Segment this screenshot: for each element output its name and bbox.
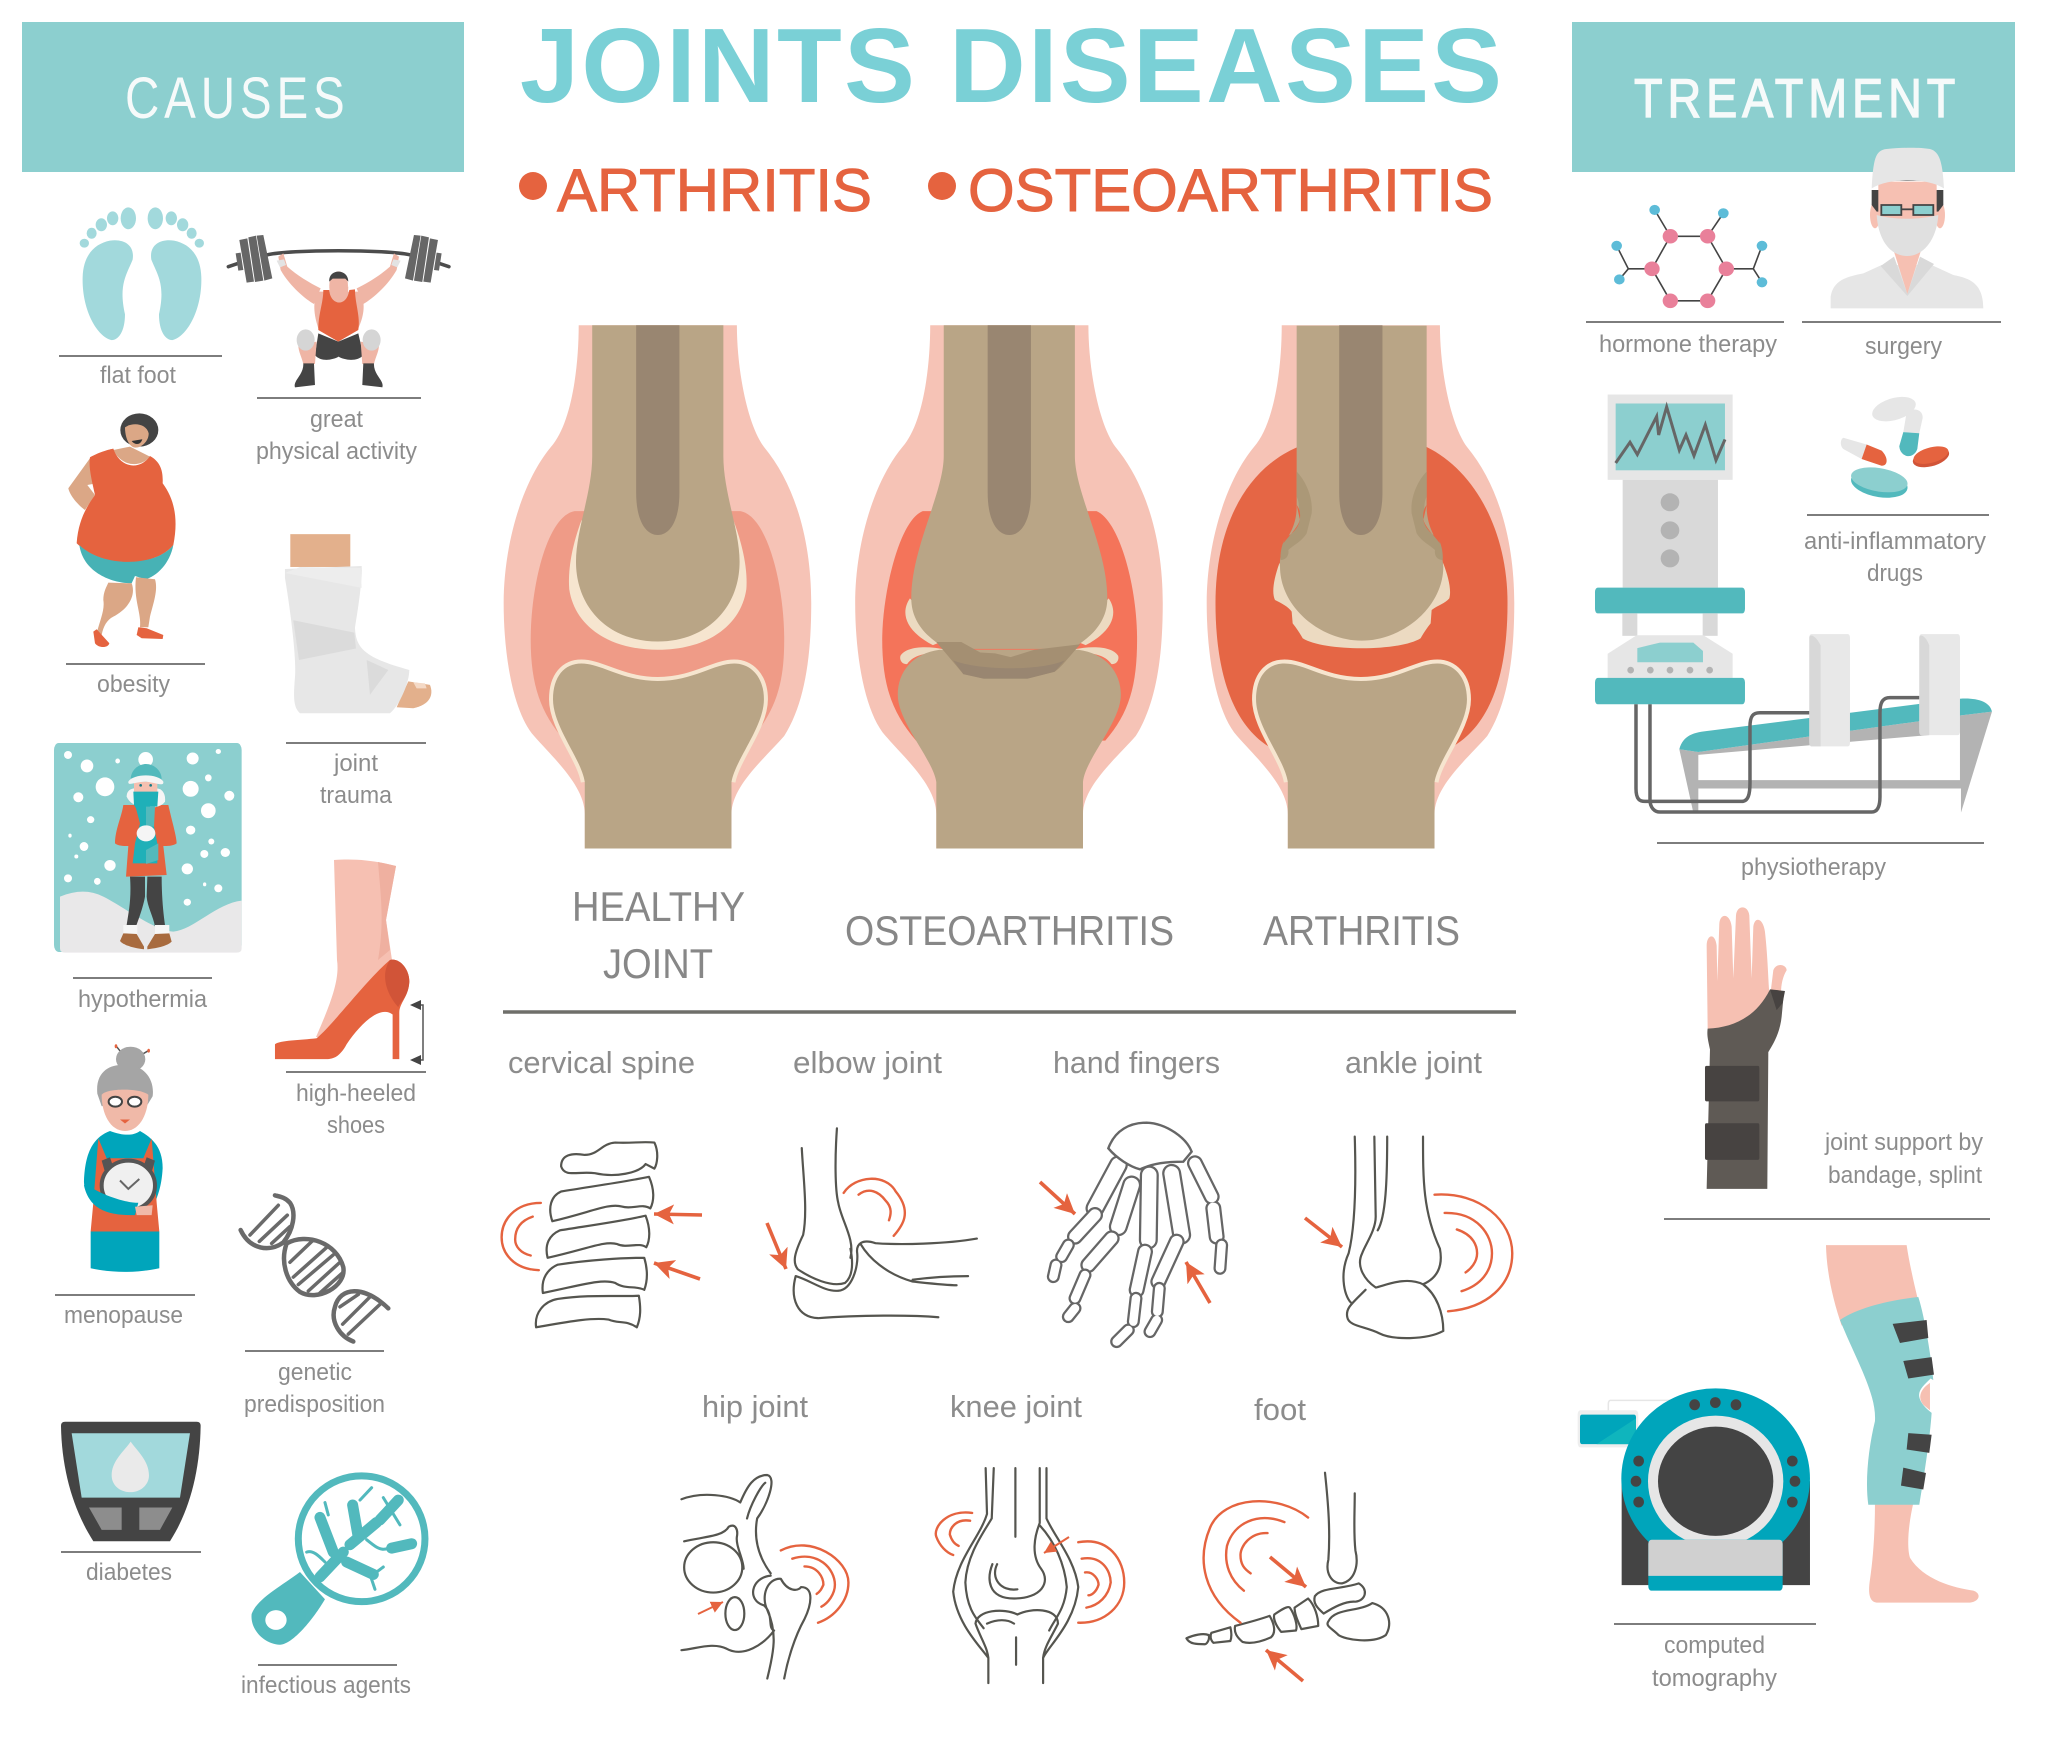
diagram: hand bones: [1040, 1123, 1222, 1342]
diagram: healthy joint: [504, 325, 811, 849]
diagram: elbow joint: [767, 1128, 977, 1318]
diagram: cervical spine: [502, 1142, 702, 1327]
icon: joint trauma: [285, 534, 431, 713]
label: flat foot: flat foot: [100, 362, 176, 389]
label: ankle joint: ankle joint: [1345, 1045, 1482, 1080]
label: anti-inflammatory drugs: [1804, 515, 1989, 587]
label: joint support by bandage, splint: [1664, 1129, 1990, 1219]
icon: surgeon: [1831, 148, 1983, 308]
panel: treatment: [1572, 22, 2015, 1692]
icon: knee brace: [1826, 1245, 1979, 1603]
heading: causes: [22, 22, 464, 172]
heading: treatment: TREATMENT: [1634, 67, 1955, 129]
icon: glucose meter: [61, 1422, 201, 1541]
caption: arthritis: ARTHRITIS: [1263, 907, 1460, 954]
label: computed tomography: computed: [1664, 1632, 1765, 1659]
label: infectious agents: infectious agents: [241, 1672, 411, 1699]
icon: magnifier with bacteria: [252, 1476, 425, 1645]
icon: obesity: [68, 413, 176, 647]
label: hip joint: hip joint: [702, 1389, 808, 1424]
caption: osteoarthritis: OSTEOARTHRITIS: [845, 907, 1174, 954]
heading: causes: CAUSES: [125, 67, 345, 131]
label: joint trauma: trauma: [320, 782, 393, 809]
label: joint support by bandage, splint: bandage, splint: [1828, 1162, 1982, 1189]
panel: affected joints: [502, 1045, 1512, 1683]
label: high-heeled shoes: [286, 1072, 426, 1139]
label: computed tomography: [1614, 1624, 1816, 1692]
label: surgery: surgery: [1865, 333, 1942, 360]
diagram: arthritis joint: [1207, 325, 1514, 849]
icon: pills: [1841, 393, 1950, 501]
label: hypothermia: hypothermia: [78, 986, 208, 1013]
label: menopause: menopause: [64, 1302, 183, 1329]
label: knee joint: knee joint: [950, 1389, 1082, 1424]
label: anti-inflammatory drugs: drugs: [1867, 560, 1923, 587]
label: obesity: [66, 664, 205, 698]
subtitle: arthritis: ARTHRITIS: [557, 157, 872, 224]
label: genetic predisposition: [244, 1351, 385, 1418]
subtitle: osteoarthritis: OSTEOARTHRITIS: [968, 157, 1493, 224]
label: genetic predisposition: predisposition: [244, 1391, 385, 1418]
panel: joint comparison: [503, 325, 1516, 1012]
diagram: ankle joint: [1305, 1137, 1512, 1338]
icon: hormone molecule: [1611, 205, 1767, 308]
label: hand fingers: hand fingers: [1053, 1045, 1220, 1080]
title: JOINTS DISEASES: [520, 7, 1502, 125]
label: joint trauma: joint: [333, 750, 378, 777]
label: joint trauma: [286, 743, 426, 809]
label: anti-inflammatory drugs: anti-inflammatory: [1804, 528, 1986, 555]
icon: hypothermia: [54, 743, 242, 953]
diagram: knee joint: [936, 1468, 1124, 1683]
heading: treatment: [1572, 22, 2015, 172]
icon: menopause: [84, 1044, 163, 1272]
diagram: osteoarthritis joint: [855, 325, 1163, 849]
icon: flat foot: [80, 207, 204, 340]
diagram: foot: [1186, 1473, 1389, 1681]
label: elbow joint: elbow joint: [793, 1045, 942, 1080]
label: cervical spine: cervical spine: [508, 1045, 695, 1080]
icon: CT scanner: [1578, 1388, 1810, 1591]
label: computed tomography: tomography: [1652, 1665, 1777, 1692]
caption: healthy joint: [572, 883, 745, 987]
label: high-heeled shoes: high-heeled: [296, 1080, 416, 1107]
icon: physiotherapy machine: [1595, 395, 1992, 813]
label: physiotherapy: physiotherapy: [1741, 854, 1886, 881]
label: great physical activity: great: [310, 406, 363, 433]
label: foot: foot: [1254, 1392, 1306, 1427]
icon: high-heeled shoe: [275, 859, 423, 1065]
label: high-heeled shoes: shoes: [327, 1112, 385, 1139]
panel: causes: [22, 22, 464, 1699]
icon: weightlifter: [228, 235, 449, 387]
icon: DNA: [241, 1195, 388, 1342]
label: diabetes: diabetes: [86, 1559, 172, 1586]
caption: healthy joint: JOINT: [603, 940, 713, 987]
label: obesity: obesity: [97, 671, 170, 698]
label: genetic predisposition: genetic: [278, 1359, 352, 1386]
icon: wrist splint: [1705, 907, 1787, 1189]
label: joint support by bandage, splint: joint support by: [1824, 1129, 1983, 1156]
label: great physical activity: [256, 398, 421, 465]
label: great physical activity: physical activity: [256, 438, 417, 465]
diagram: hip joint: [681, 1475, 848, 1679]
label: diabetes: [61, 1552, 201, 1586]
caption: healthy joint: HEALTHY: [572, 883, 745, 930]
label: hormone therapy: hormone therapy: [1599, 331, 1777, 358]
